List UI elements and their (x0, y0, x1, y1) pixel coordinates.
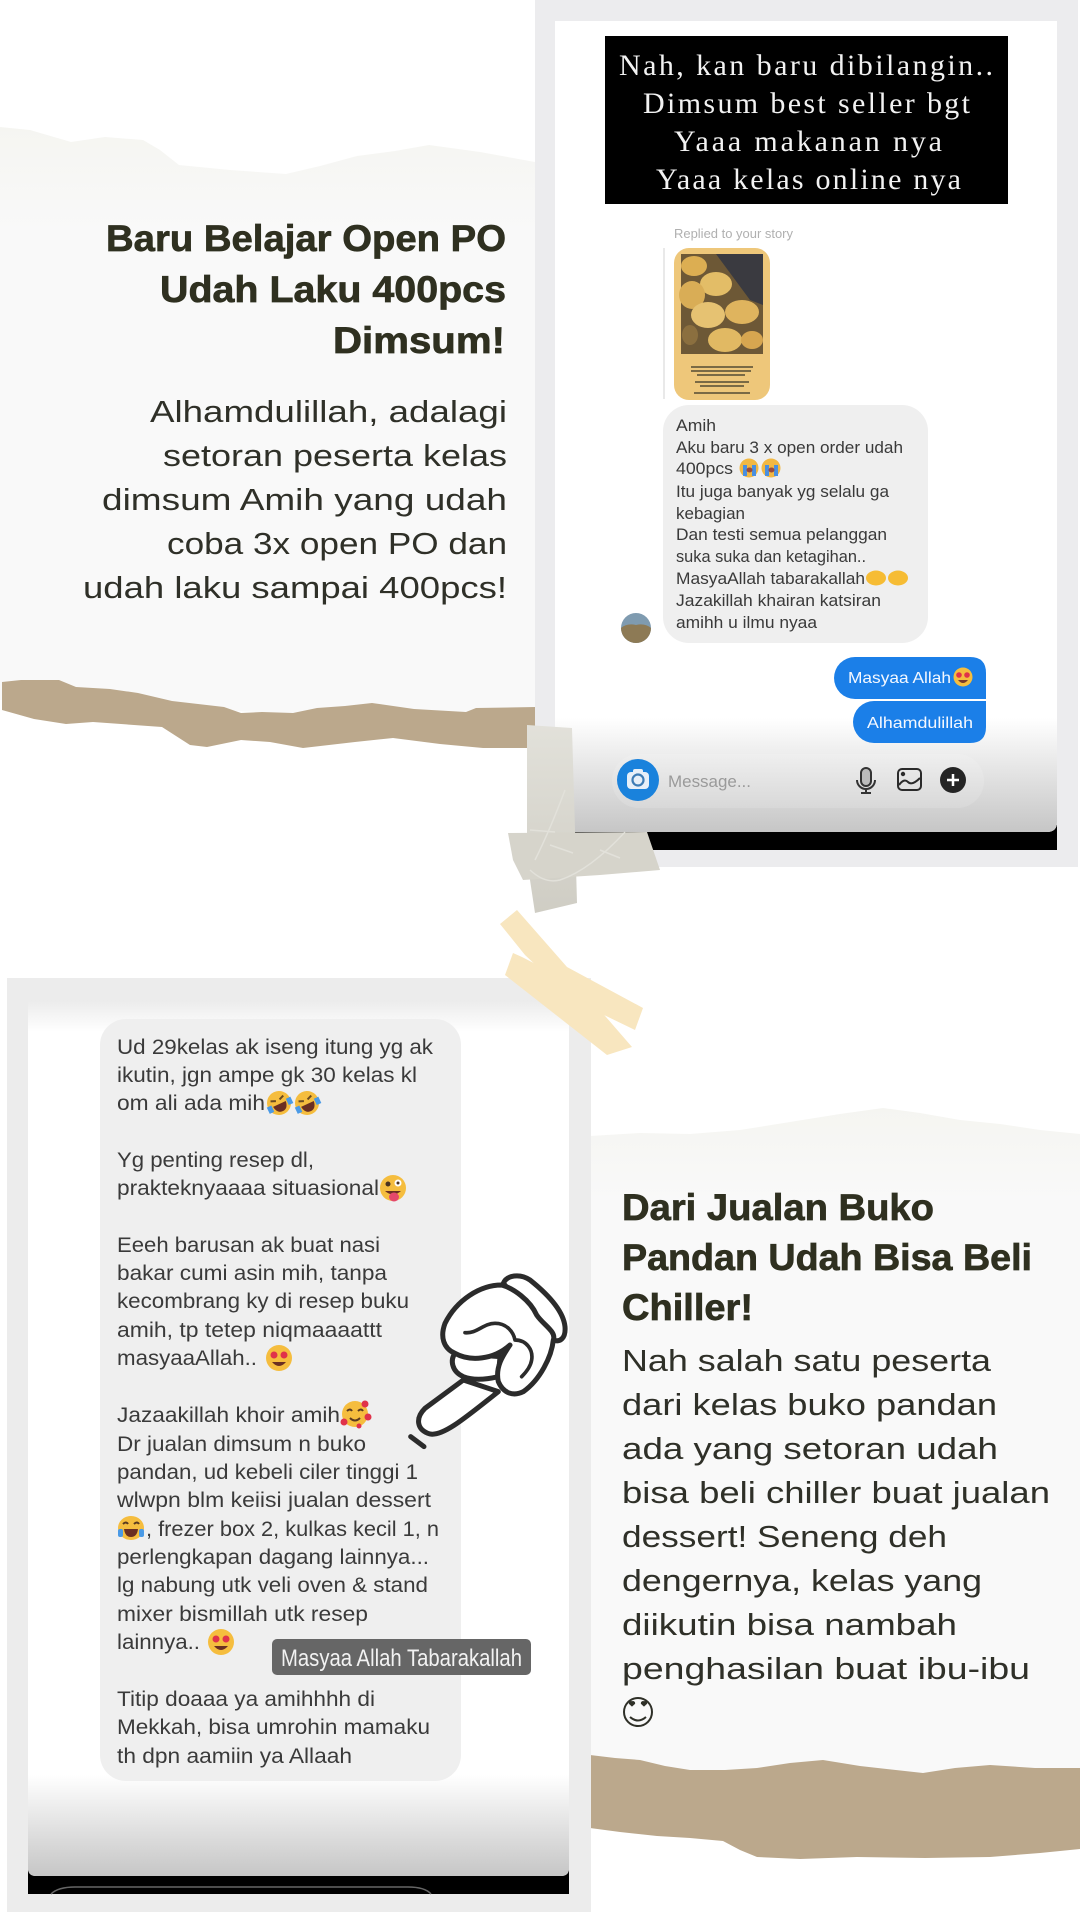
story caption box (605, 36, 1008, 204)
paper background (0, 127, 535, 230)
message bubble: prakteknyaaaa situasional (117, 1176, 379, 1200)
heading (106, 218, 506, 361)
icon: heart eyes outline emoji (624, 1698, 652, 1726)
incoming message bubble: 400pcs (676, 460, 733, 478)
panel: top chat screenshot (535, 0, 1078, 867)
top fade (28, 1000, 569, 1032)
outgoing bubble 1 (834, 657, 986, 699)
message bubble (100, 1019, 461, 1781)
reply line (663, 248, 665, 399)
panel: bottom torn paper with story text (590, 1108, 1080, 1859)
decoration: yellow tape (500, 910, 643, 1055)
message input bar (612, 754, 984, 808)
black bottom bar (555, 825, 1057, 850)
icon: crying emojis (740, 458, 780, 478)
bottom gradient (28, 1775, 569, 1876)
story caption box: Yaaa kelas online nya (656, 163, 961, 196)
incoming message bubble (663, 405, 928, 643)
message bubble: masyaaAllah.. (117, 1346, 257, 1370)
message bubble: ikutin, jgn ampe gk 30 kelas kl (117, 1063, 417, 1087)
story caption box: Dimsum best seller bgt (643, 87, 971, 120)
torn brown strip (590, 1755, 1080, 1859)
body text (622, 1343, 1050, 1686)
incoming message bubble: suka suka dan ketagihan.. (676, 548, 866, 566)
heading: Dimsum! (333, 320, 505, 361)
message bubble: lainnya.. (117, 1630, 200, 1654)
message bubble: amih, tp tetep niqmaaaattt (117, 1318, 382, 1342)
incoming message bubble: Aku baru 3 x open order udah (676, 439, 903, 457)
outgoing bubble 2: Alhamdulillah (867, 715, 973, 732)
message bubble: , frezer box 2, kulkas kecil 1, n (146, 1517, 439, 1541)
body text: dessert! Seneng deh (622, 1519, 947, 1554)
icon: heart eyes emoji (266, 1345, 292, 1371)
icon: zany emoji (380, 1175, 406, 1202)
icon: heart eyes emoji (208, 1629, 234, 1655)
outgoing bubble 2 (853, 701, 986, 743)
message bubble: Ud 29kelas ak iseng itung yg ak (117, 1035, 433, 1059)
body text: Nah salah satu peserta (622, 1343, 992, 1378)
replied label: Replied to your story (674, 227, 794, 241)
incoming message bubble: kebagian (676, 505, 745, 523)
icon: smiling hearts emoji (340, 1400, 372, 1428)
message bubble: om ali ada mih (117, 1091, 265, 1115)
message bubble: Eeeh barusan ak buat nasi (117, 1233, 380, 1257)
incoming message bubble: Amih (676, 417, 716, 435)
body text: coba 3x open PO dan (167, 526, 507, 561)
panel: bottom chat screenshot (7, 978, 591, 1912)
message bubble: wlwpn blm keiisi jualan dessert (116, 1488, 431, 1512)
message bubble: mixer bismillah utk resep (117, 1602, 368, 1626)
bottom gradient (555, 718, 1057, 832)
body text: bisa beli chiller buat jualan (622, 1475, 1050, 1510)
message bubble: kecombrang ky di resep buku (117, 1289, 409, 1313)
paper top edge (590, 1108, 1080, 1200)
story caption box: Yaaa makanan nya (674, 125, 942, 158)
message bubble: Dr jualan dimsum n buko (117, 1432, 366, 1456)
heading: Udah Laku 400pcs (160, 269, 506, 310)
body text: ada yang setoran udah (622, 1431, 998, 1466)
screenshot inner (28, 1000, 569, 1876)
screenshot frame (7, 978, 591, 1912)
icon: tears of joy emoji (118, 1516, 144, 1540)
story thumbnail (674, 248, 770, 400)
icon: camera (617, 759, 659, 801)
sticker label (272, 1639, 531, 1675)
body text: diikutin bisa nambah (622, 1607, 957, 1642)
heading: Dari Jualan Buko (622, 1187, 934, 1228)
message bubble: pandan, ud kebeli ciler tinggi 1 (117, 1460, 418, 1484)
incoming message bubble: Dan testi semua pelanggan (676, 526, 887, 544)
sticker label: Masyaa Allah Tabarakallah (281, 1645, 522, 1672)
message bubble: lg nabung utk veli oven & stand (117, 1573, 428, 1597)
message bubble: Yg penting resep dl, (117, 1148, 314, 1172)
incoming message bubble: MasyaAllah tabarakallah (676, 570, 865, 588)
icon: rolling laughing emojis (262, 1087, 324, 1119)
message bubble: perlengkapan dagang lainnya... (117, 1545, 429, 1569)
paper body (590, 1198, 1080, 1798)
avatar (621, 613, 651, 643)
body text: udah laku sampai 400pcs! (83, 570, 507, 605)
outgoing bubble 1: Masyaa Allah (848, 670, 951, 687)
body text: dari kelas buko pandan (622, 1387, 997, 1422)
message bubble: th dpn aamiin ya Allaah (117, 1744, 352, 1768)
torn brown strip (2, 680, 536, 748)
incoming message bubble: Itu juga banyak yg selalu ga (676, 483, 890, 501)
message bubble: bakar cumi asin mih, tanpa (117, 1261, 387, 1285)
decoration: grey masking tape (508, 725, 660, 913)
body text: dengernya, kelas yang (622, 1563, 982, 1598)
body text: dimsum Amih yang udah (102, 482, 507, 517)
body text: setoran peserta kelas (163, 438, 507, 473)
icon: pointing hand (411, 1276, 565, 1447)
heading: Baru Belajar Open PO (106, 218, 506, 259)
message bubble: Titip doaaa ya amihhhh di (117, 1687, 375, 1711)
paper body (0, 228, 535, 725)
icon: microphone (857, 768, 875, 793)
heading: Chiller! (622, 1287, 753, 1328)
home bar arc (51, 1887, 431, 1894)
incoming message bubble: amihh u ilmu nyaa (676, 614, 818, 632)
story caption box: Nah, kan baru dibilangin.. (619, 49, 993, 82)
body text: penghasilan buat ibu-ibu (622, 1651, 1030, 1686)
message input bar: Message... (668, 773, 751, 791)
panel: top torn paper with story text (0, 127, 536, 748)
incoming message bubble: Jazakillah khairan katsiran (676, 592, 881, 610)
message bubble: Mekkah, bisa umrohin mamaku (117, 1715, 430, 1739)
icon: open hands emojis (866, 570, 908, 586)
black bottom bar (28, 1860, 569, 1894)
heading: Pandan Udah Bisa Beli (622, 1237, 1032, 1278)
icon: gallery (898, 769, 921, 790)
icon: plus button (940, 767, 966, 793)
screenshot inner (555, 21, 1057, 832)
body text (83, 394, 507, 605)
heading (622, 1187, 1032, 1328)
message bubble: Jazaakillah khoir amih (117, 1403, 340, 1427)
screenshot frame (535, 0, 1078, 867)
body text: Alhamdulillah, adalagi (150, 394, 507, 429)
